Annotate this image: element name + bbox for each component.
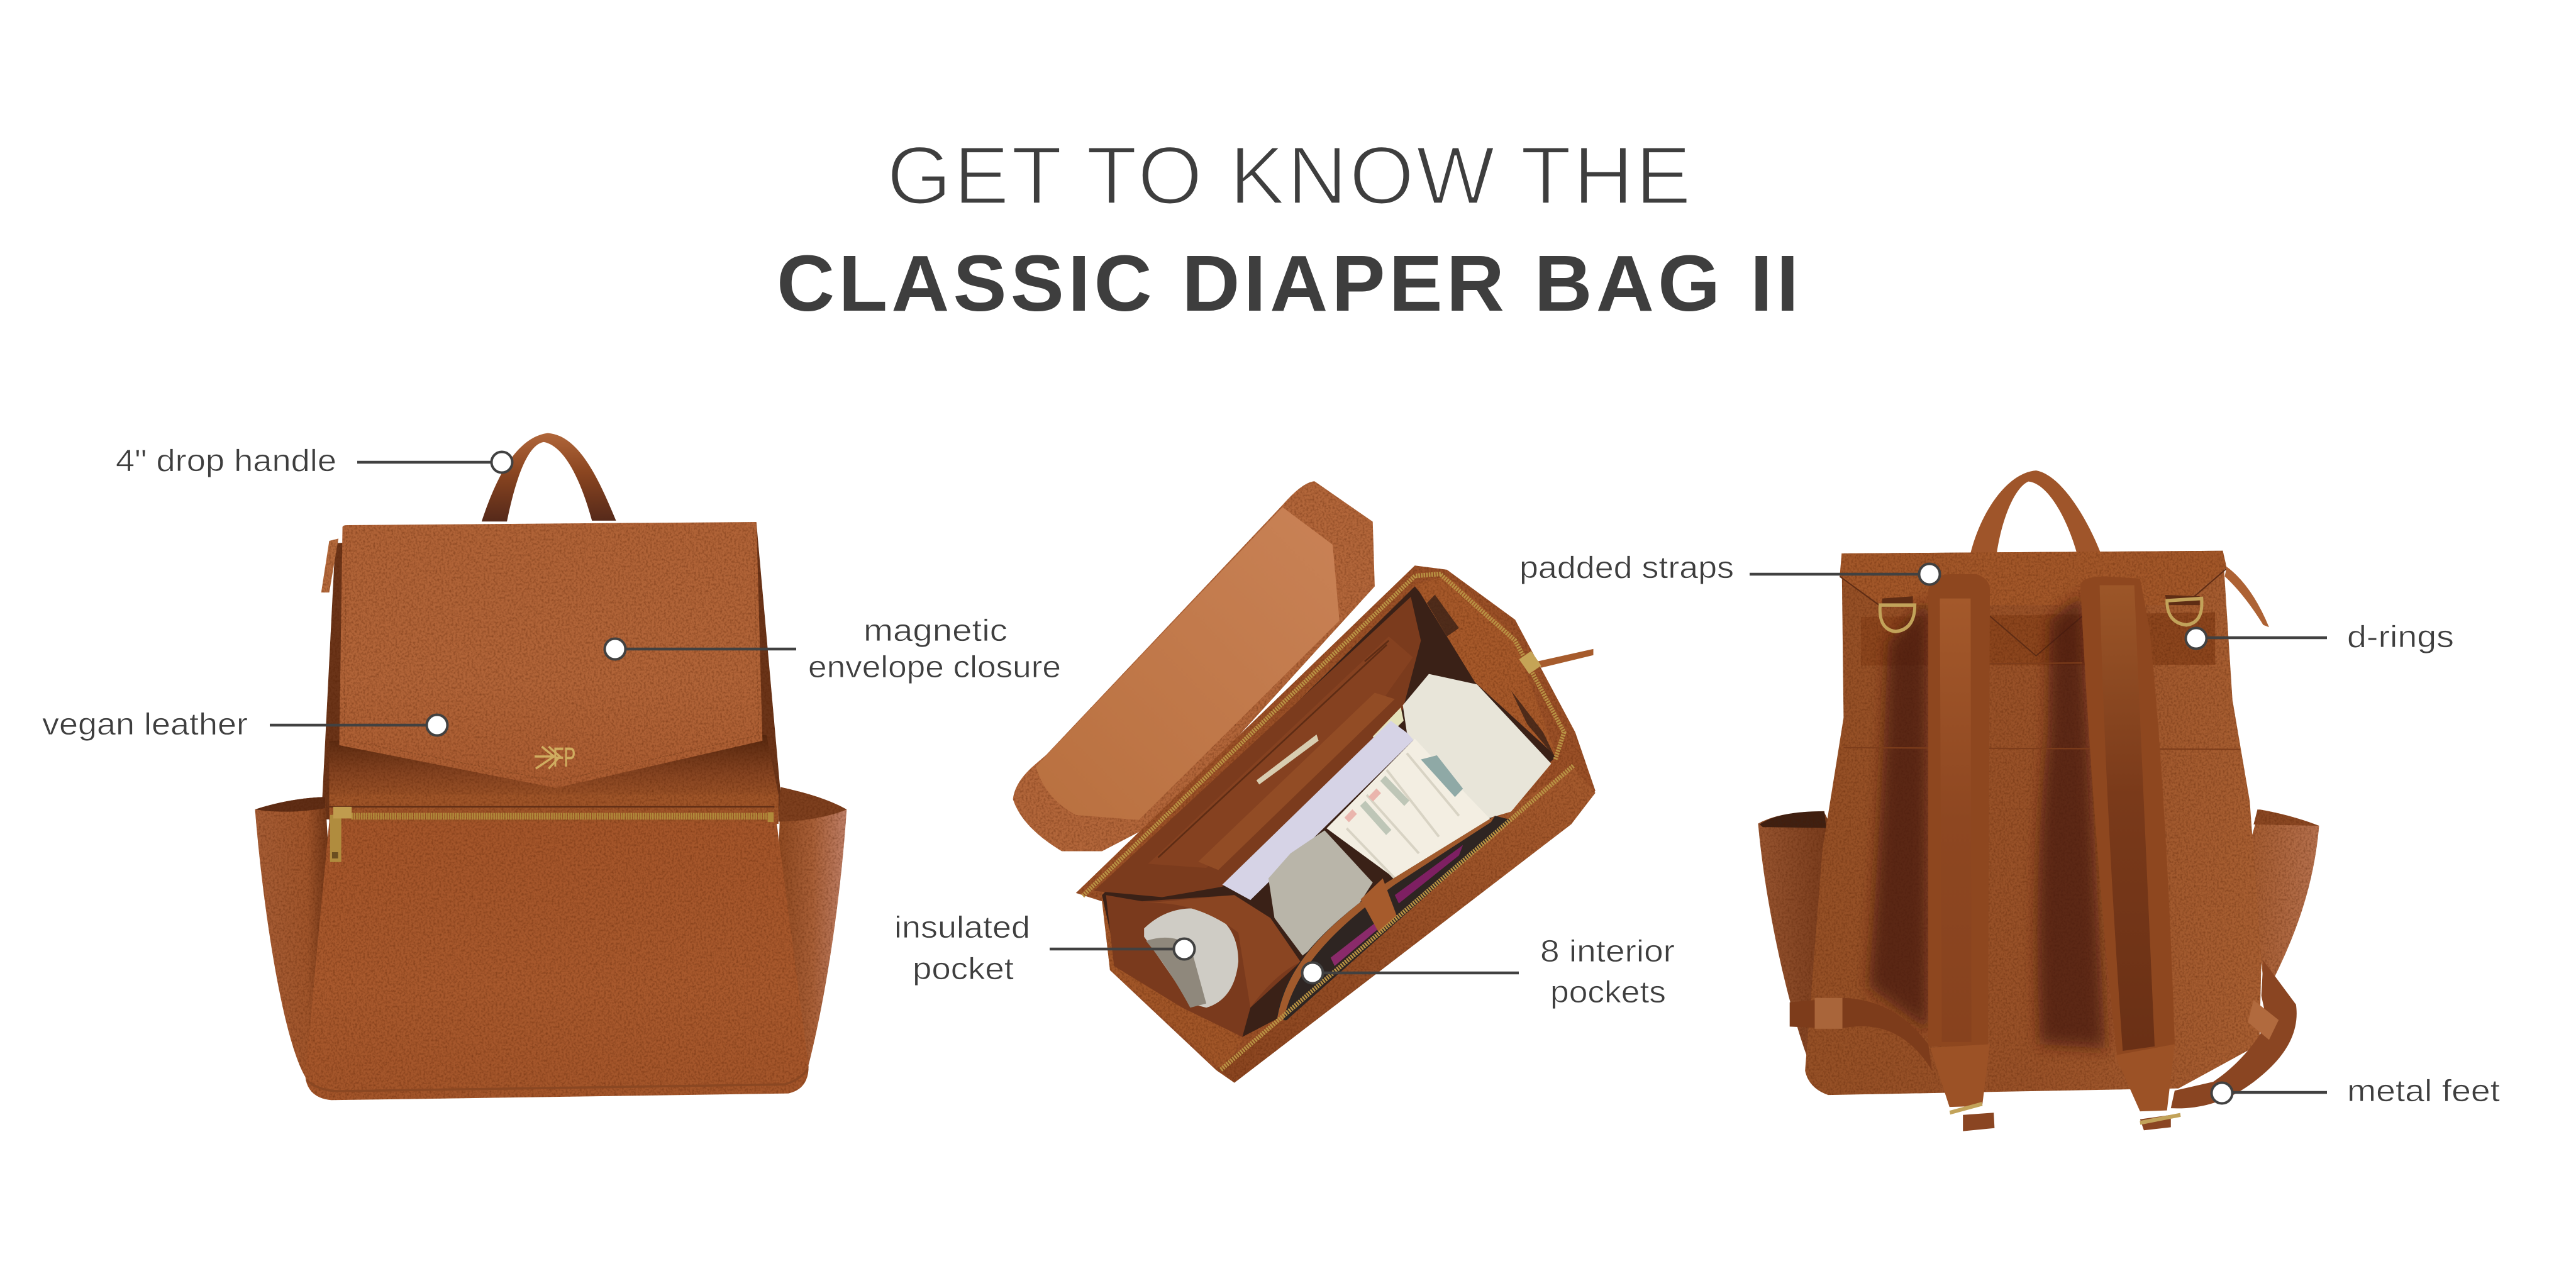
stitch lines: [1843, 663, 2240, 750]
side webbing straps: [1790, 960, 2297, 1108]
diapers: [1326, 674, 1552, 879]
bottom edge of bag: [306, 1069, 808, 1091]
insulated pocket with bottle: [1106, 895, 1301, 1037]
d-rings: [1880, 595, 2202, 631]
callout: padded straps: [1519, 551, 1940, 585]
top handle: [482, 433, 616, 521]
front zipper: [330, 807, 774, 862]
callout: 8 interior pockets: 8 interior: [1540, 935, 1675, 969]
callout: 4" drop handle: [116, 444, 512, 478]
callout: magnetic envelope closure: envelope closure: [808, 650, 1061, 684]
callout: magnetic envelope closure: magnetic: [863, 614, 1008, 648]
zipper pull tab: [1519, 649, 1594, 674]
callout: vegan leather: vegan leather: [42, 708, 248, 741]
bag: front view: [255, 433, 847, 1100]
open flap: [1013, 481, 1375, 852]
FP logo: [535, 742, 575, 772]
bag shell: [1076, 565, 1596, 1083]
callout: metal feet: [2211, 1074, 2500, 1108]
front interior pocket with phone: [1277, 816, 1511, 1023]
strap end tabs and metal buckles: [1930, 1044, 2180, 1131]
bag: open interior view: [1013, 481, 1596, 1083]
zipper pull: [2224, 567, 2269, 627]
callout: insulated pocket: [894, 911, 1195, 986]
callout: insulated pocket: insulated: [894, 911, 1030, 945]
flap edge lines: [1840, 569, 2227, 656]
callout: 4" drop handle: 4" drop handle: [116, 444, 336, 478]
fabric pockets: [1094, 597, 1421, 897]
title: CLASSIC DIAPER BAG II: [777, 239, 1802, 328]
callout: d-rings: d-rings: [2347, 620, 2454, 654]
strap shadows: [1868, 594, 2106, 1048]
leather body and side pockets: [255, 522, 847, 1100]
callout: 8 interior pockets: pockets: [1550, 975, 1666, 1009]
title: [777, 129, 1802, 328]
gold zippers: [1083, 574, 1574, 1070]
callout: vegan leather: [42, 708, 448, 741]
flap stitching: [344, 528, 759, 781]
callout: padded straps: padded straps: [1519, 551, 1734, 585]
notebook: [1223, 708, 1415, 900]
callout: magnetic envelope closure: [605, 614, 1061, 684]
FP logo: FP: [553, 742, 575, 772]
interior wall leather: [1415, 576, 1557, 757]
callout: insulated pocket: pocket: [913, 952, 1014, 986]
bag interior: [1102, 586, 1555, 1037]
top handle webbing: [1967, 470, 2107, 577]
bag: back view: [1758, 470, 2319, 1131]
side pockets and body: [1758, 551, 2319, 1095]
folded cloth: [1269, 830, 1373, 955]
callout: 8 interior pockets: [1302, 935, 1675, 1009]
title: GET TO KNOW THE: [887, 129, 1693, 221]
callout: metal feet: metal feet: [2347, 1074, 2500, 1108]
callout: d-rings: [2186, 620, 2454, 654]
padded straps: [1928, 574, 2175, 1055]
